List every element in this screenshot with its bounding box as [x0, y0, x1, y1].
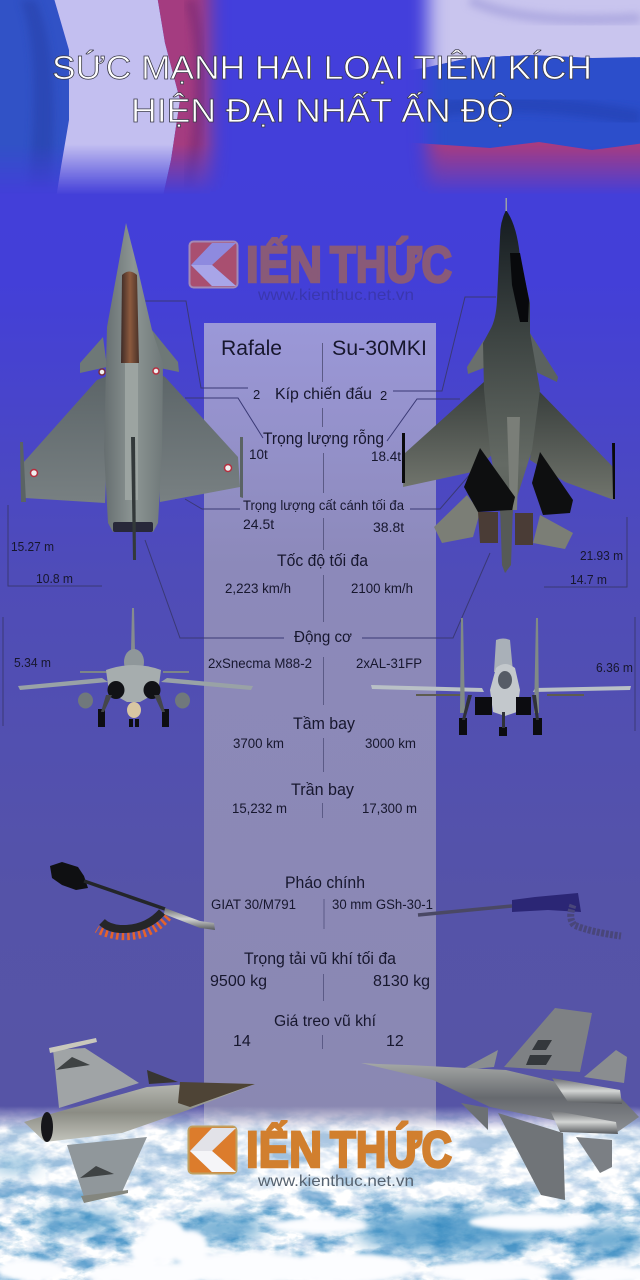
watermark logo: top: IẾN: [246, 235, 322, 293]
panel headers: [221, 337, 427, 360]
clouds: [0, 1106, 640, 1280]
dimension labels: 10.8 m: [36, 571, 73, 586]
spec: main gun: GIAT 30/M791: [211, 897, 296, 912]
spec: service ceiling: 17,300 m: [362, 801, 417, 816]
left stabilizer: [434, 495, 480, 543]
right wing: [155, 372, 240, 502]
receiver: [512, 893, 581, 912]
upper canard: [461, 1050, 498, 1070]
dorsal tail: [494, 638, 513, 672]
logo: bottom: www.kienthuc.net.vn: [257, 1173, 414, 1190]
tail boom: [500, 505, 513, 573]
Rafale top view: [20, 223, 243, 560]
Su-30MKI lower view: [361, 1008, 639, 1200]
left wing: [403, 381, 492, 487]
spec: range: 3000 km: [365, 736, 416, 751]
spec: weapon hardpoints: 14: [233, 1033, 251, 1050]
spec: weapon hardpoints: Giá treo vũ khí: [274, 1013, 377, 1030]
Su-30MKI front view: [371, 618, 631, 736]
barrel: [84, 881, 165, 909]
spec: crew: 2: [253, 387, 260, 402]
spec: engine: 2xSnecma M88-2: [208, 656, 312, 671]
right stabilizer: [533, 515, 573, 549]
right vertical tail: [532, 452, 573, 515]
spec: range: [233, 714, 416, 751]
watermark logo: top: [190, 235, 452, 304]
nose probe: [506, 198, 507, 211]
panel headers: Rafale: [221, 337, 282, 360]
upper tail: [584, 1050, 627, 1083]
drop tanks: [78, 692, 93, 708]
lower tail: [576, 1137, 612, 1173]
dimension labels: 14.7 m: [570, 572, 607, 587]
logo: bottom: [188, 1120, 452, 1190]
spec: service ceiling: 15,232 m: [232, 801, 287, 816]
left vertical tail: [464, 448, 515, 512]
title: SỨC MẠNH HAI LOẠI TIÊM KÍCH: [52, 49, 592, 86]
lower wing: [67, 1137, 147, 1197]
canopy: [124, 649, 144, 675]
exhaust: [41, 1112, 53, 1142]
nose: [178, 1082, 255, 1107]
ammunition belt tips: [97, 917, 168, 936]
tail fin: [131, 608, 135, 652]
logo: bottom: IẾN: [246, 1120, 322, 1178]
fuselage and canopy: [490, 664, 520, 716]
dimension labels: 15.27 m: [11, 539, 54, 554]
upper wing: [504, 1008, 592, 1072]
spec: main gun: 30 mm GSh-30-1: [332, 897, 433, 912]
cockpit glass: [498, 671, 512, 689]
fins: [460, 618, 539, 713]
spec: max payload: Trọng tải vũ khí tối đa: [244, 950, 397, 968]
watermark logo: top: www.kienthuc.net.vn: [257, 287, 414, 304]
Rafale front view: [18, 608, 253, 727]
lower wingtip rail: [81, 1190, 128, 1203]
spec: engine: Động cơ: [294, 629, 352, 646]
spec: main gun: [211, 874, 433, 912]
fuselage: [104, 223, 163, 532]
spec: max takeoff weight: Trọng lượng cất cánh tối đa: [243, 497, 404, 513]
title: HIỆN ĐẠI NHẤT ẤN ĐỘ: [131, 92, 514, 129]
spec: engine: 2xAL-31FP: [356, 656, 422, 671]
receiver: [50, 862, 88, 890]
landing gear: [98, 709, 169, 727]
upper wing slots: [526, 1040, 552, 1065]
spec: max payload: 9500 kg: [210, 973, 267, 990]
spec: crew: 2: [380, 388, 387, 403]
upper engine: [552, 1078, 622, 1104]
right wing: [530, 388, 614, 500]
ammunition belt: [102, 912, 162, 929]
title: [52, 49, 592, 129]
spec: max takeoff weight: 24.5t: [243, 516, 274, 532]
wingtip rails: [402, 433, 615, 499]
centre spine: [125, 363, 138, 500]
spec: max speed: [225, 552, 413, 596]
upper wing: [53, 1048, 139, 1108]
leader lines and size rulers: [3, 297, 635, 1049]
intakes: [108, 681, 124, 699]
left canard: [80, 337, 107, 373]
spec: max speed: 2,223 km/h: [225, 581, 291, 596]
fuselage: [361, 1063, 639, 1133]
spec: empty weight: Trọng lượng rỗng: [263, 429, 384, 448]
right canard: [530, 333, 558, 382]
spec: empty weight: [249, 429, 401, 464]
tail fin: [131, 437, 136, 560]
spec: weapon hardpoints: [233, 1013, 404, 1050]
watermark logo: top: THỨC: [330, 236, 452, 293]
upper wingtip rail: [49, 1038, 97, 1053]
lower wing: [498, 1113, 565, 1200]
cockpit: [510, 253, 529, 322]
left wing: [23, 375, 110, 503]
dimension labels: 5.34 m: [14, 655, 51, 670]
panel headers: Su-30MKI: [332, 337, 427, 360]
lower canard: [461, 1103, 488, 1130]
spec: weapon hardpoints: 12: [386, 1033, 404, 1050]
canard: [147, 1070, 178, 1084]
left canard: [467, 340, 486, 374]
Su-30MKI top view: [402, 198, 615, 573]
upper wing panel: [56, 1057, 90, 1070]
fuselage: [106, 665, 161, 702]
barrel: [418, 906, 512, 915]
spec: engine: [208, 629, 422, 671]
wingtip rails: [20, 437, 243, 502]
spec: max payload: 8130 kg: [373, 973, 430, 990]
logo: bottom: THỨC: [330, 1121, 452, 1178]
silver muzzle: [164, 908, 215, 930]
roundels: [30, 368, 232, 476]
dimension labels: 6.36 m: [596, 660, 633, 675]
Russian flag: [415, 0, 640, 190]
lower wing panel: [80, 1166, 114, 1178]
spec: max speed: 2100 km/h: [351, 581, 413, 596]
fuselage: [483, 210, 540, 573]
spec: main gun: Pháo chính: [285, 874, 365, 892]
fuselage: [24, 1083, 255, 1142]
spec: empty weight: 18.4t: [371, 449, 401, 464]
spec: range: Tầm bay: [293, 714, 355, 733]
Rafale lower view: [24, 1038, 255, 1203]
stabilizers: [416, 694, 584, 696]
gun: GIAT 30: [50, 862, 215, 936]
lower engine: [550, 1110, 618, 1134]
spec: empty weight: 10t: [249, 447, 268, 462]
spec: service ceiling: Trần bay: [291, 780, 354, 799]
centre spine highlight: [507, 417, 520, 510]
wings: [371, 685, 631, 692]
spec: range: 3700 km: [233, 736, 284, 751]
landing gear: [459, 718, 542, 736]
spec: service ceiling: [232, 780, 417, 816]
gun: GSh-30-1: [418, 893, 621, 936]
dimension labels: [11, 539, 633, 675]
intakes: [475, 697, 531, 715]
right canard: [152, 330, 179, 372]
engine nozzles: [478, 512, 533, 545]
spec: max takeoff weight: [243, 497, 404, 535]
spec: max takeoff weight: 38.8t: [373, 519, 404, 535]
French flag: [0, 0, 222, 192]
landing lights: [127, 702, 141, 718]
canopy: [121, 272, 139, 363]
comparison panel: [204, 323, 436, 1133]
engine exhausts: [113, 522, 153, 532]
spec: max speed: Tốc độ tối đa: [277, 552, 369, 570]
wings: [18, 678, 253, 690]
spec: max payload: [210, 950, 430, 990]
dimension labels: 21.93 m: [580, 548, 623, 563]
ammunition belt: [571, 905, 621, 936]
spec: crew: Kíp chiến đấu: [275, 386, 372, 403]
